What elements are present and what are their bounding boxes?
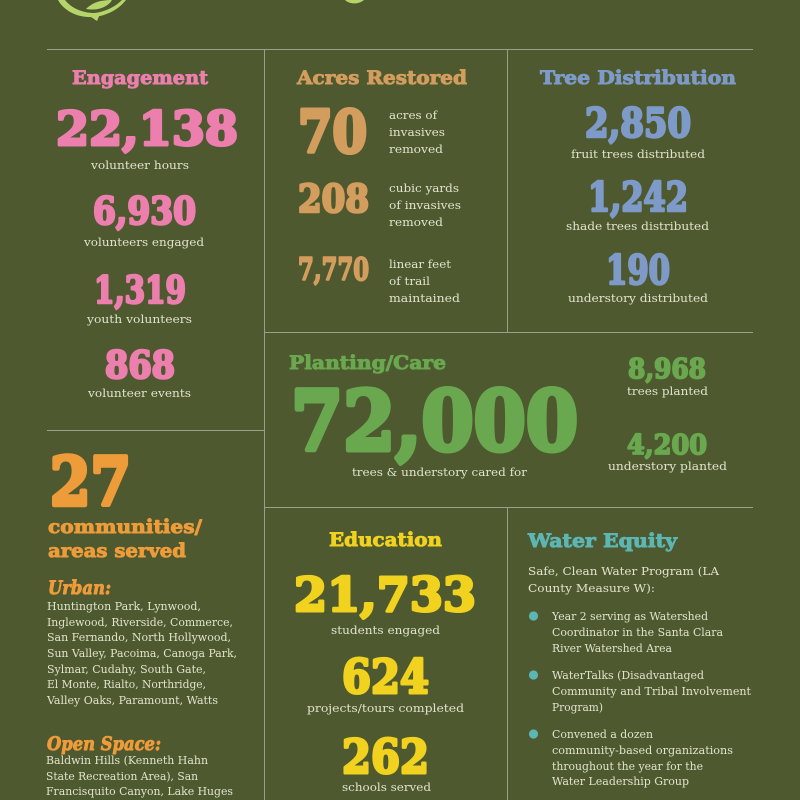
- text block: urban communities: San Fernando, North Hollywood,: [47, 631, 231, 644]
- stat: acres of invasives removed: acres of: [389, 108, 438, 122]
- stat: fruit trees: 2,850: [585, 100, 691, 147]
- logo fragment: leaf tip: [345, 0, 364, 3]
- stat: trees and understory cared for: trees & understory cared for: [352, 465, 528, 479]
- panel: tree distribution: [540, 67, 736, 305]
- stat: linear feet maintained: [298, 252, 461, 305]
- bullet: watershed coordinator: Coordinator in the Santa Clara: [552, 626, 723, 639]
- stat: shade trees: shade trees distributed: [566, 219, 710, 233]
- logo: leaf emblem cropped at top: [58, 0, 126, 21]
- text block: urban communities: Inglewood, Riverside, Commerce,: [47, 616, 233, 629]
- stat: linear feet maintained: 7,770: [298, 252, 369, 288]
- bullet: water leadership group: community-based organizations: [552, 744, 733, 757]
- subheading: urban: Urban:: [48, 577, 111, 599]
- bullet: watershed coordinator: [529, 610, 723, 655]
- bullet: watershed coordinator: Year 2 serving as Watershed: [551, 610, 708, 623]
- subheading: open space: Open Space:: [47, 733, 161, 755]
- stat: understory planted: 4,200: [627, 430, 707, 461]
- heading: water equity: Water Equity: [527, 530, 678, 552]
- stat: trees planted: trees planted: [627, 384, 709, 398]
- stat: volunteers engaged: 6,930: [93, 189, 196, 233]
- heading: tree distribution: Tree Distribution: [540, 67, 736, 89]
- stat: volunteer events: 868: [105, 343, 175, 387]
- stat: volunteer events: [87, 343, 191, 400]
- heading: communities / areas served: [48, 516, 202, 562]
- heading: engagement: Engagement: [72, 67, 208, 89]
- stat: trees planted: 8,968: [628, 354, 706, 385]
- text block: urban communities: Huntington Park, Lynwood,: [47, 600, 201, 613]
- text block: urban communities: Sylmar, Cudahy, South Gate,: [47, 663, 206, 676]
- stat: linear feet maintained: linear feet: [389, 257, 451, 271]
- stat: understory planted: [608, 430, 728, 473]
- text block: urban communities: Valley Oaks, Paramount, Watts: [46, 694, 218, 707]
- bullet: water leadership group: throughout the year for the: [552, 760, 703, 773]
- panel: education: [294, 529, 476, 794]
- stat: understory: 190: [606, 247, 670, 294]
- stat: trees planted: [627, 354, 709, 398]
- bullet: water leadership group: Water Leadership Group: [552, 775, 689, 788]
- panel: water equity: [527, 530, 752, 788]
- stat: students engaged: 21,733: [294, 568, 476, 623]
- bullet: water leadership group: Convened a dozen: [552, 728, 653, 741]
- panel: communities served: [46, 443, 237, 798]
- text block: open space areas: [46, 754, 233, 798]
- stat: projects and tours completed: 624: [342, 650, 429, 705]
- stat: volunteer hours: 22,138: [56, 102, 238, 157]
- stat: shade trees: 1,242: [588, 174, 688, 221]
- stat: students engaged: students engaged: [331, 623, 441, 637]
- text block: program intro: [528, 564, 720, 595]
- stat: understory: [568, 247, 709, 305]
- stat: understory: understory distributed: [568, 291, 709, 305]
- stat: linear feet maintained: maintained: [389, 291, 461, 305]
- stat: fruit trees: [571, 100, 706, 161]
- stat: volunteer events: volunteer events: [87, 386, 191, 400]
- bullet: water leadership group: [529, 728, 733, 788]
- stat: fruit trees: fruit trees distributed: [571, 147, 706, 161]
- stat: understory planted: understory planted: [608, 459, 728, 473]
- text block: open space areas: State Recreation Area), San: [46, 770, 198, 783]
- text block: urban communities: El Monte, Rialto, Northridge,: [47, 678, 206, 691]
- stat: cubic yards removed: removed: [389, 215, 444, 229]
- stat: cubic yards removed: [298, 176, 461, 229]
- text block: program intro: Safe, Clean Water Program (LA: [528, 564, 720, 578]
- heading: acres restored: Acres Restored: [296, 67, 467, 89]
- stat: cubic yards removed: cubic yards: [389, 181, 459, 195]
- stat: cubic yards removed: 208: [298, 176, 369, 221]
- stat: schools served: 262: [342, 730, 429, 785]
- stat: volunteer hours: volunteer hours: [90, 158, 189, 172]
- text block: program intro: County Measure W):: [528, 581, 655, 595]
- stat: youth volunteers: [86, 268, 192, 326]
- text block: open space areas: Francisquito Canyon, Lake Huges: [46, 785, 233, 798]
- stat: 27: 27: [50, 443, 131, 521]
- stat: acres of invasives removed: 70: [298, 98, 367, 166]
- heading: planting/care: Planting/Care: [289, 352, 446, 374]
- bullet: watertalks: Community and Tribal Involvement: [552, 685, 752, 698]
- stat: acres of invasives removed: invasives: [389, 125, 445, 139]
- stat: volunteers engaged: volunteers engaged: [83, 235, 205, 249]
- bullet: watertalks: Program): [552, 701, 603, 714]
- heading: communities / areas served: communities/: [48, 516, 202, 538]
- bullet: watertalks: WaterTalks (Disadvantaged: [552, 669, 704, 682]
- heading: communities / areas served: areas served: [48, 540, 186, 562]
- stat: shade trees: [566, 174, 710, 233]
- bullet: watershed coordinator: River Watershed Area: [552, 642, 672, 655]
- stat: projects and tours completed: [307, 650, 465, 715]
- panel: planting and care: [289, 352, 728, 479]
- stat: acres of invasives removed: [298, 98, 445, 166]
- bullet: watertalks: [529, 669, 752, 714]
- stat: projects and tours completed: projects/tours completed: [307, 701, 465, 715]
- panel: engagement: [56, 67, 238, 400]
- panel: acres restored: [296, 67, 467, 305]
- heading: education: Education: [329, 529, 442, 551]
- stat: cubic yards removed: of invasives: [389, 198, 461, 212]
- stat: acres of invasives removed: removed: [389, 142, 444, 156]
- stat: youth volunteers: youth volunteers: [86, 312, 192, 326]
- stat: trees and understory cared for: 72,000: [291, 374, 578, 470]
- stat: youth volunteers: 1,319: [94, 268, 186, 312]
- text block: urban communities: [46, 600, 237, 707]
- stat: volunteers engaged: [83, 189, 205, 249]
- text block: open space areas: Baldwin Hills (Kenneth Hahn: [46, 754, 208, 767]
- stat: schools served: schools served: [342, 780, 432, 794]
- text block: urban communities: Sun Valley, Pacoima, Canoga Park,: [47, 647, 237, 660]
- stat: linear feet maintained: of trail: [389, 274, 430, 288]
